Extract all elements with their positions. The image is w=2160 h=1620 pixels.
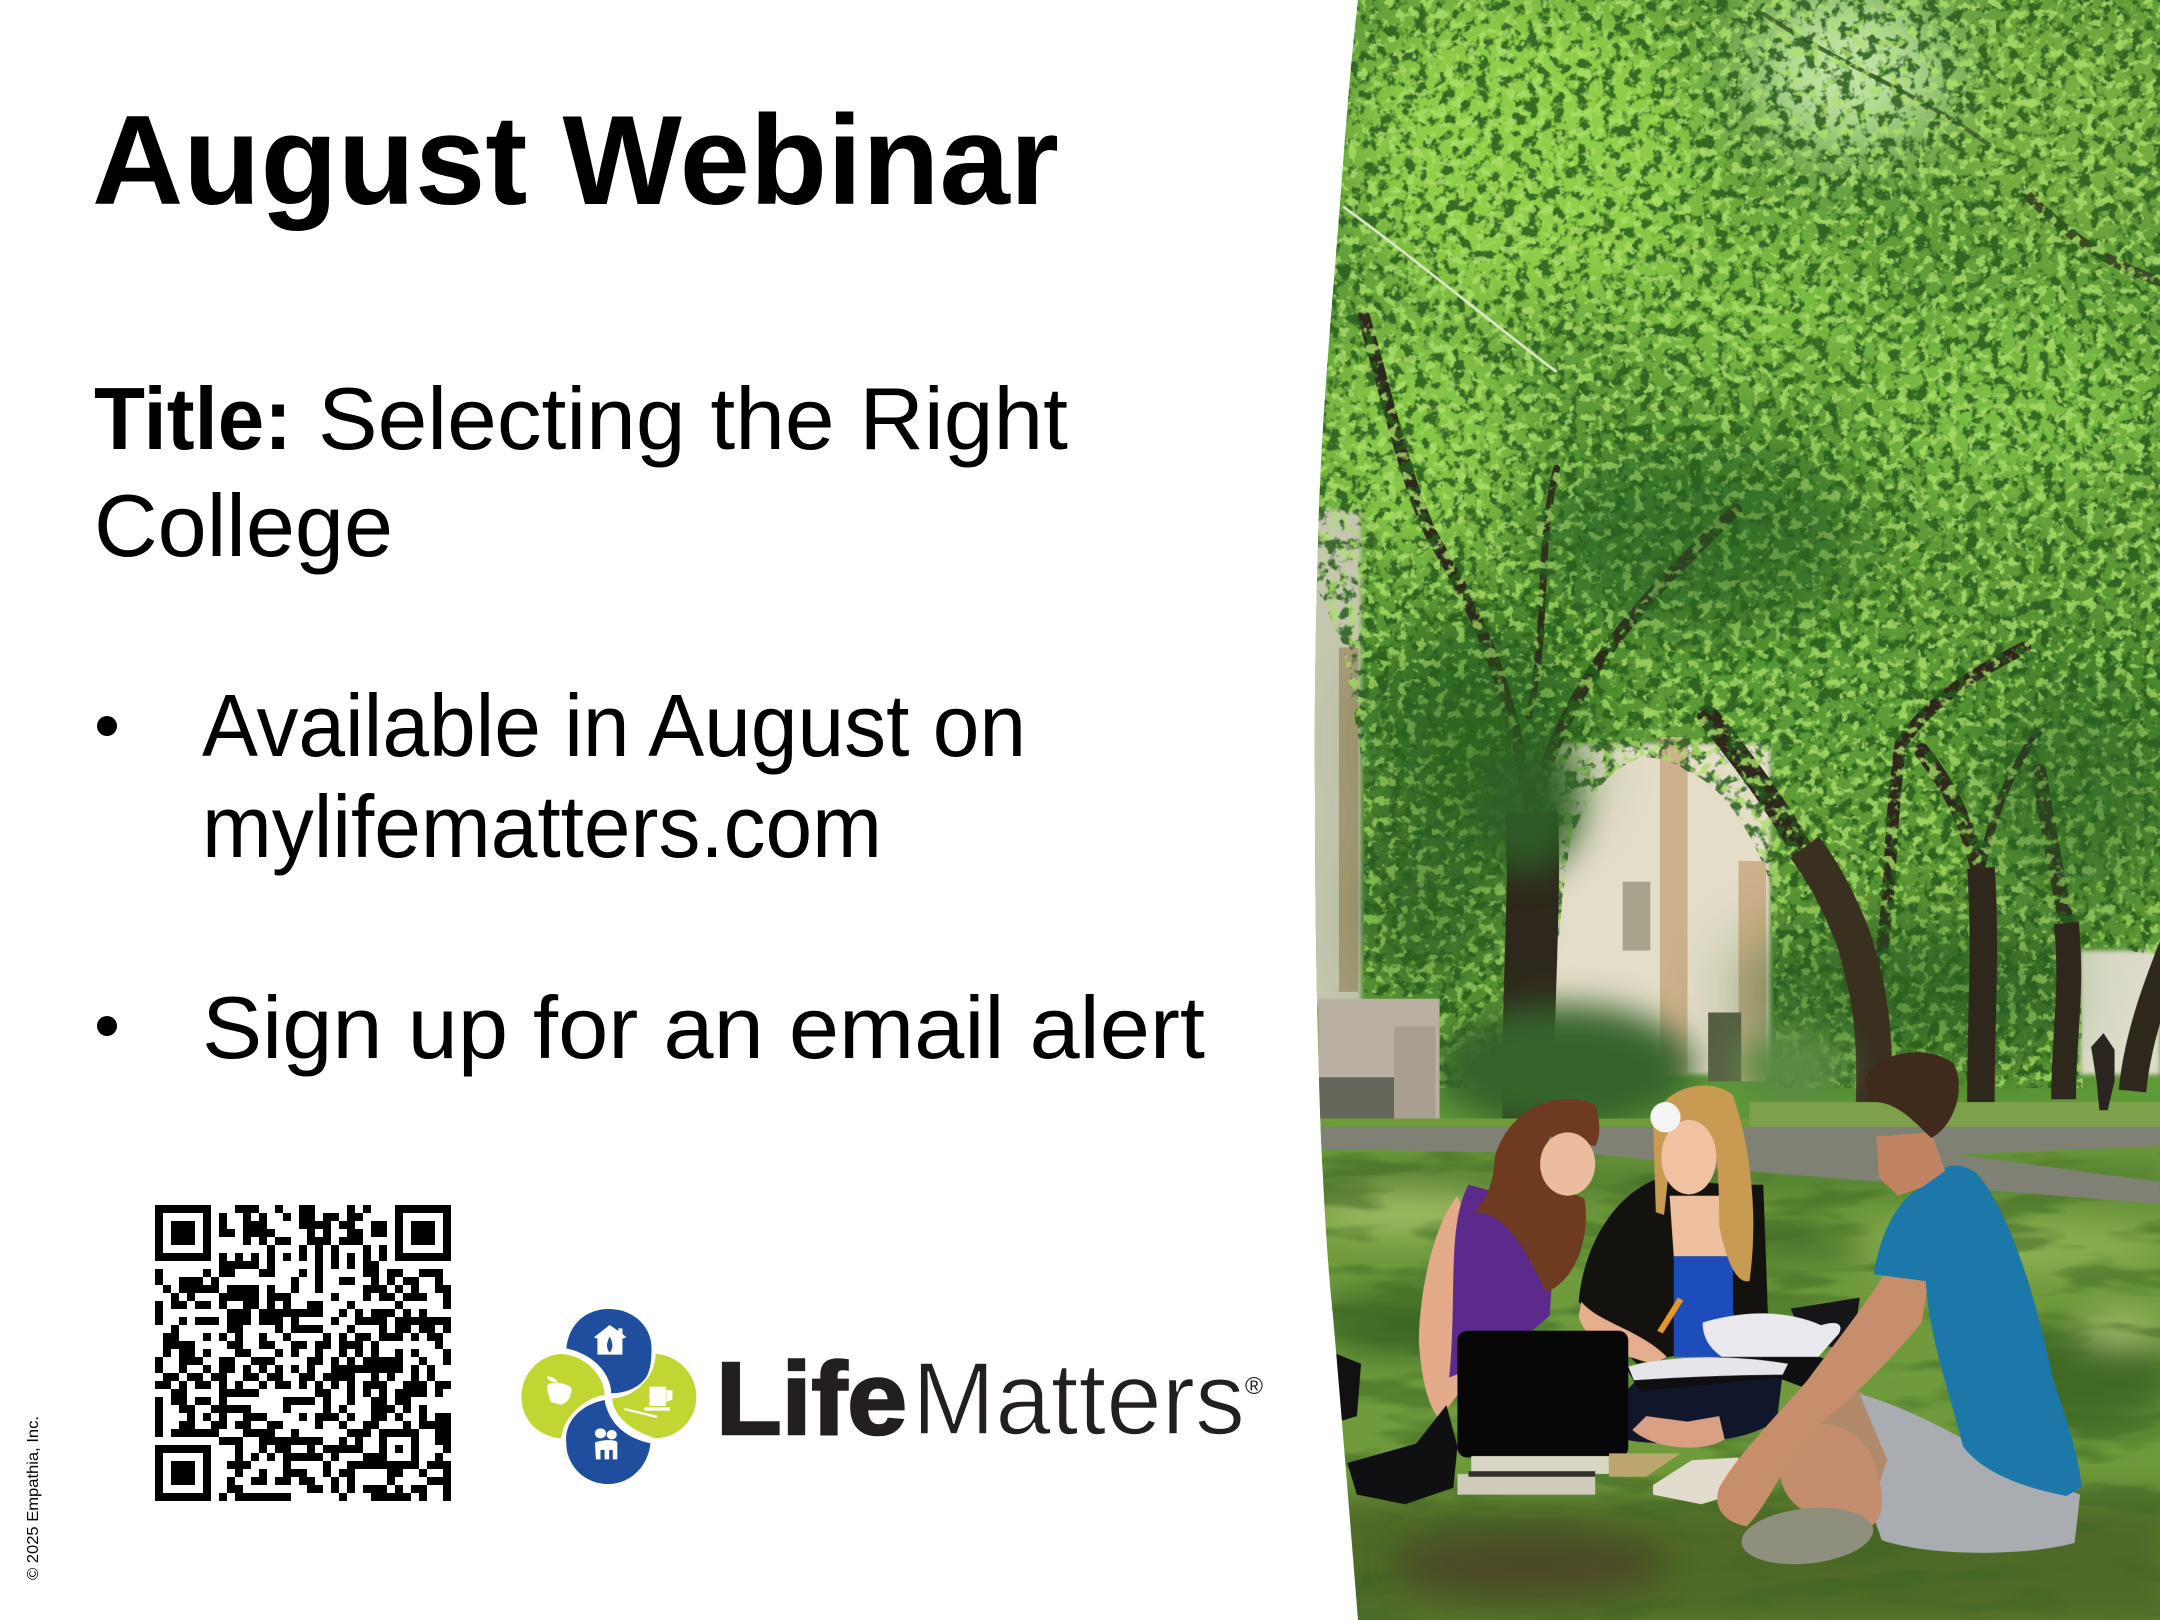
- photo: grass texture: [1309, 1152, 2160, 1620]
- photo: building facade: [1550, 737, 2160, 1081]
- girl two: foot and sandal: [1632, 1416, 1725, 1448]
- girl one: neckline: [1513, 1185, 1564, 1265]
- petal: left green with apple icon: [521, 1354, 605, 1438]
- photo: walking path: [1309, 1127, 2160, 1204]
- photo: soft canopy light and shade: [1316, 0, 2160, 1061]
- stacked books: [1457, 1453, 1681, 1495]
- small books: [1653, 1457, 1738, 1504]
- girl two: hair: [1653, 1085, 1753, 1281]
- open book: [1628, 1357, 1788, 1380]
- logo wordmark: [716, 1341, 1263, 1456]
- girl two: blue top: [1674, 1256, 1738, 1357]
- girl two: chest: [1670, 1196, 1733, 1256]
- girl one: hair: [1474, 1099, 1599, 1292]
- photo: foliage base colour: [1295, 0, 2160, 1171]
- man: arm: [1717, 1274, 1929, 1526]
- man: neck: [1876, 1132, 1945, 1196]
- photo: dirt patches: [1391, 1530, 1667, 1597]
- photo: distant walker: [2091, 1033, 2115, 1110]
- girl one: purple top: [1449, 1185, 1554, 1378]
- photo: tree trunks: [1529, 813, 2160, 1132]
- bullet: email alert: Sign up for an email alert: [202, 978, 1205, 1077]
- petal: right green with mug icon: [612, 1354, 696, 1438]
- pencil: [1657, 1298, 1683, 1333]
- girl two: cardigan: [1579, 1178, 1769, 1364]
- photo: students studying on a college lawn under trees: [1295, 0, 2160, 1620]
- bullet: availability: mylifematters.com: [202, 777, 882, 876]
- man: shoe: [1739, 1502, 1876, 1570]
- photo: pale branch: [1343, 207, 1557, 372]
- QR data modules: [155, 1209, 451, 1497]
- man: knee: [1780, 1424, 1882, 1532]
- photo: stone tower on the left: [1309, 510, 1361, 1006]
- LifeMatters logo: [521, 1309, 1263, 1484]
- copyright note: © 2025 Empathia, Inc.: [25, 1416, 42, 1580]
- girl one: face: [1540, 1132, 1595, 1196]
- photo: ivy on main trunk: [1471, 737, 1581, 875]
- girl two: flower: [1650, 1102, 1681, 1132]
- logo wordmark: Matters: [912, 1341, 1245, 1456]
- logo wordmark: ®: [1245, 1373, 1263, 1400]
- photo: lit upper lawn strip: [1750, 1102, 2160, 1127]
- binder under papers: [1626, 1350, 1846, 1398]
- photo: lawn: [1295, 1119, 2160, 1620]
- petal: bottom blue with family icon: [566, 1400, 651, 1484]
- dark bag behind papers: [1791, 1298, 1860, 1350]
- man: far leg: [1791, 1391, 1929, 1502]
- photo: lawn shadows and light: [1309, 1164, 2160, 1430]
- petal: top blue with house icon: [566, 1309, 652, 1393]
- papers: [1703, 1313, 1841, 1357]
- QR finder patterns: [155, 1205, 451, 1501]
- black bag: [1347, 1405, 1457, 1504]
- photo: upper branches behind the leaves: [1364, 14, 2160, 992]
- photo: foreground dry grass: [1322, 1495, 2160, 1620]
- bullet: availability: Available in August on: [202, 676, 1026, 775]
- girl two: arm: [1579, 1302, 1667, 1364]
- title: August Webinar: [92, 89, 1059, 231]
- girl two: face: [1661, 1120, 1716, 1194]
- QR code: [155, 1205, 451, 1501]
- black backpack left: [1333, 1353, 1361, 1422]
- man: shorts: [1860, 1394, 2080, 1553]
- laptop: [1457, 1331, 1628, 1457]
- webinar title line one: Selecting the Right: [318, 369, 1068, 468]
- webinar title line two: College: [94, 476, 393, 575]
- photo: man in blue shirt and girls: [1333, 1052, 2081, 1570]
- man: hair: [1864, 1052, 1959, 1138]
- logo mark: four interlocking petals: [521, 1309, 696, 1484]
- bullet: availability: [97, 676, 1026, 876]
- photo: deep shade over the lower canopy: [1371, 461, 2160, 1061]
- girl two: jeans: [1626, 1364, 1784, 1443]
- webinar title line one: Title:: [94, 369, 292, 468]
- photo: hedge and stone wall: [1318, 999, 1846, 1131]
- logo wordmark: Life: [716, 1341, 907, 1456]
- girl one: arm: [1419, 1196, 1468, 1419]
- man: blue t-shirt: [1873, 1166, 2081, 1496]
- photo: leaf texture: [1295, 0, 2160, 1102]
